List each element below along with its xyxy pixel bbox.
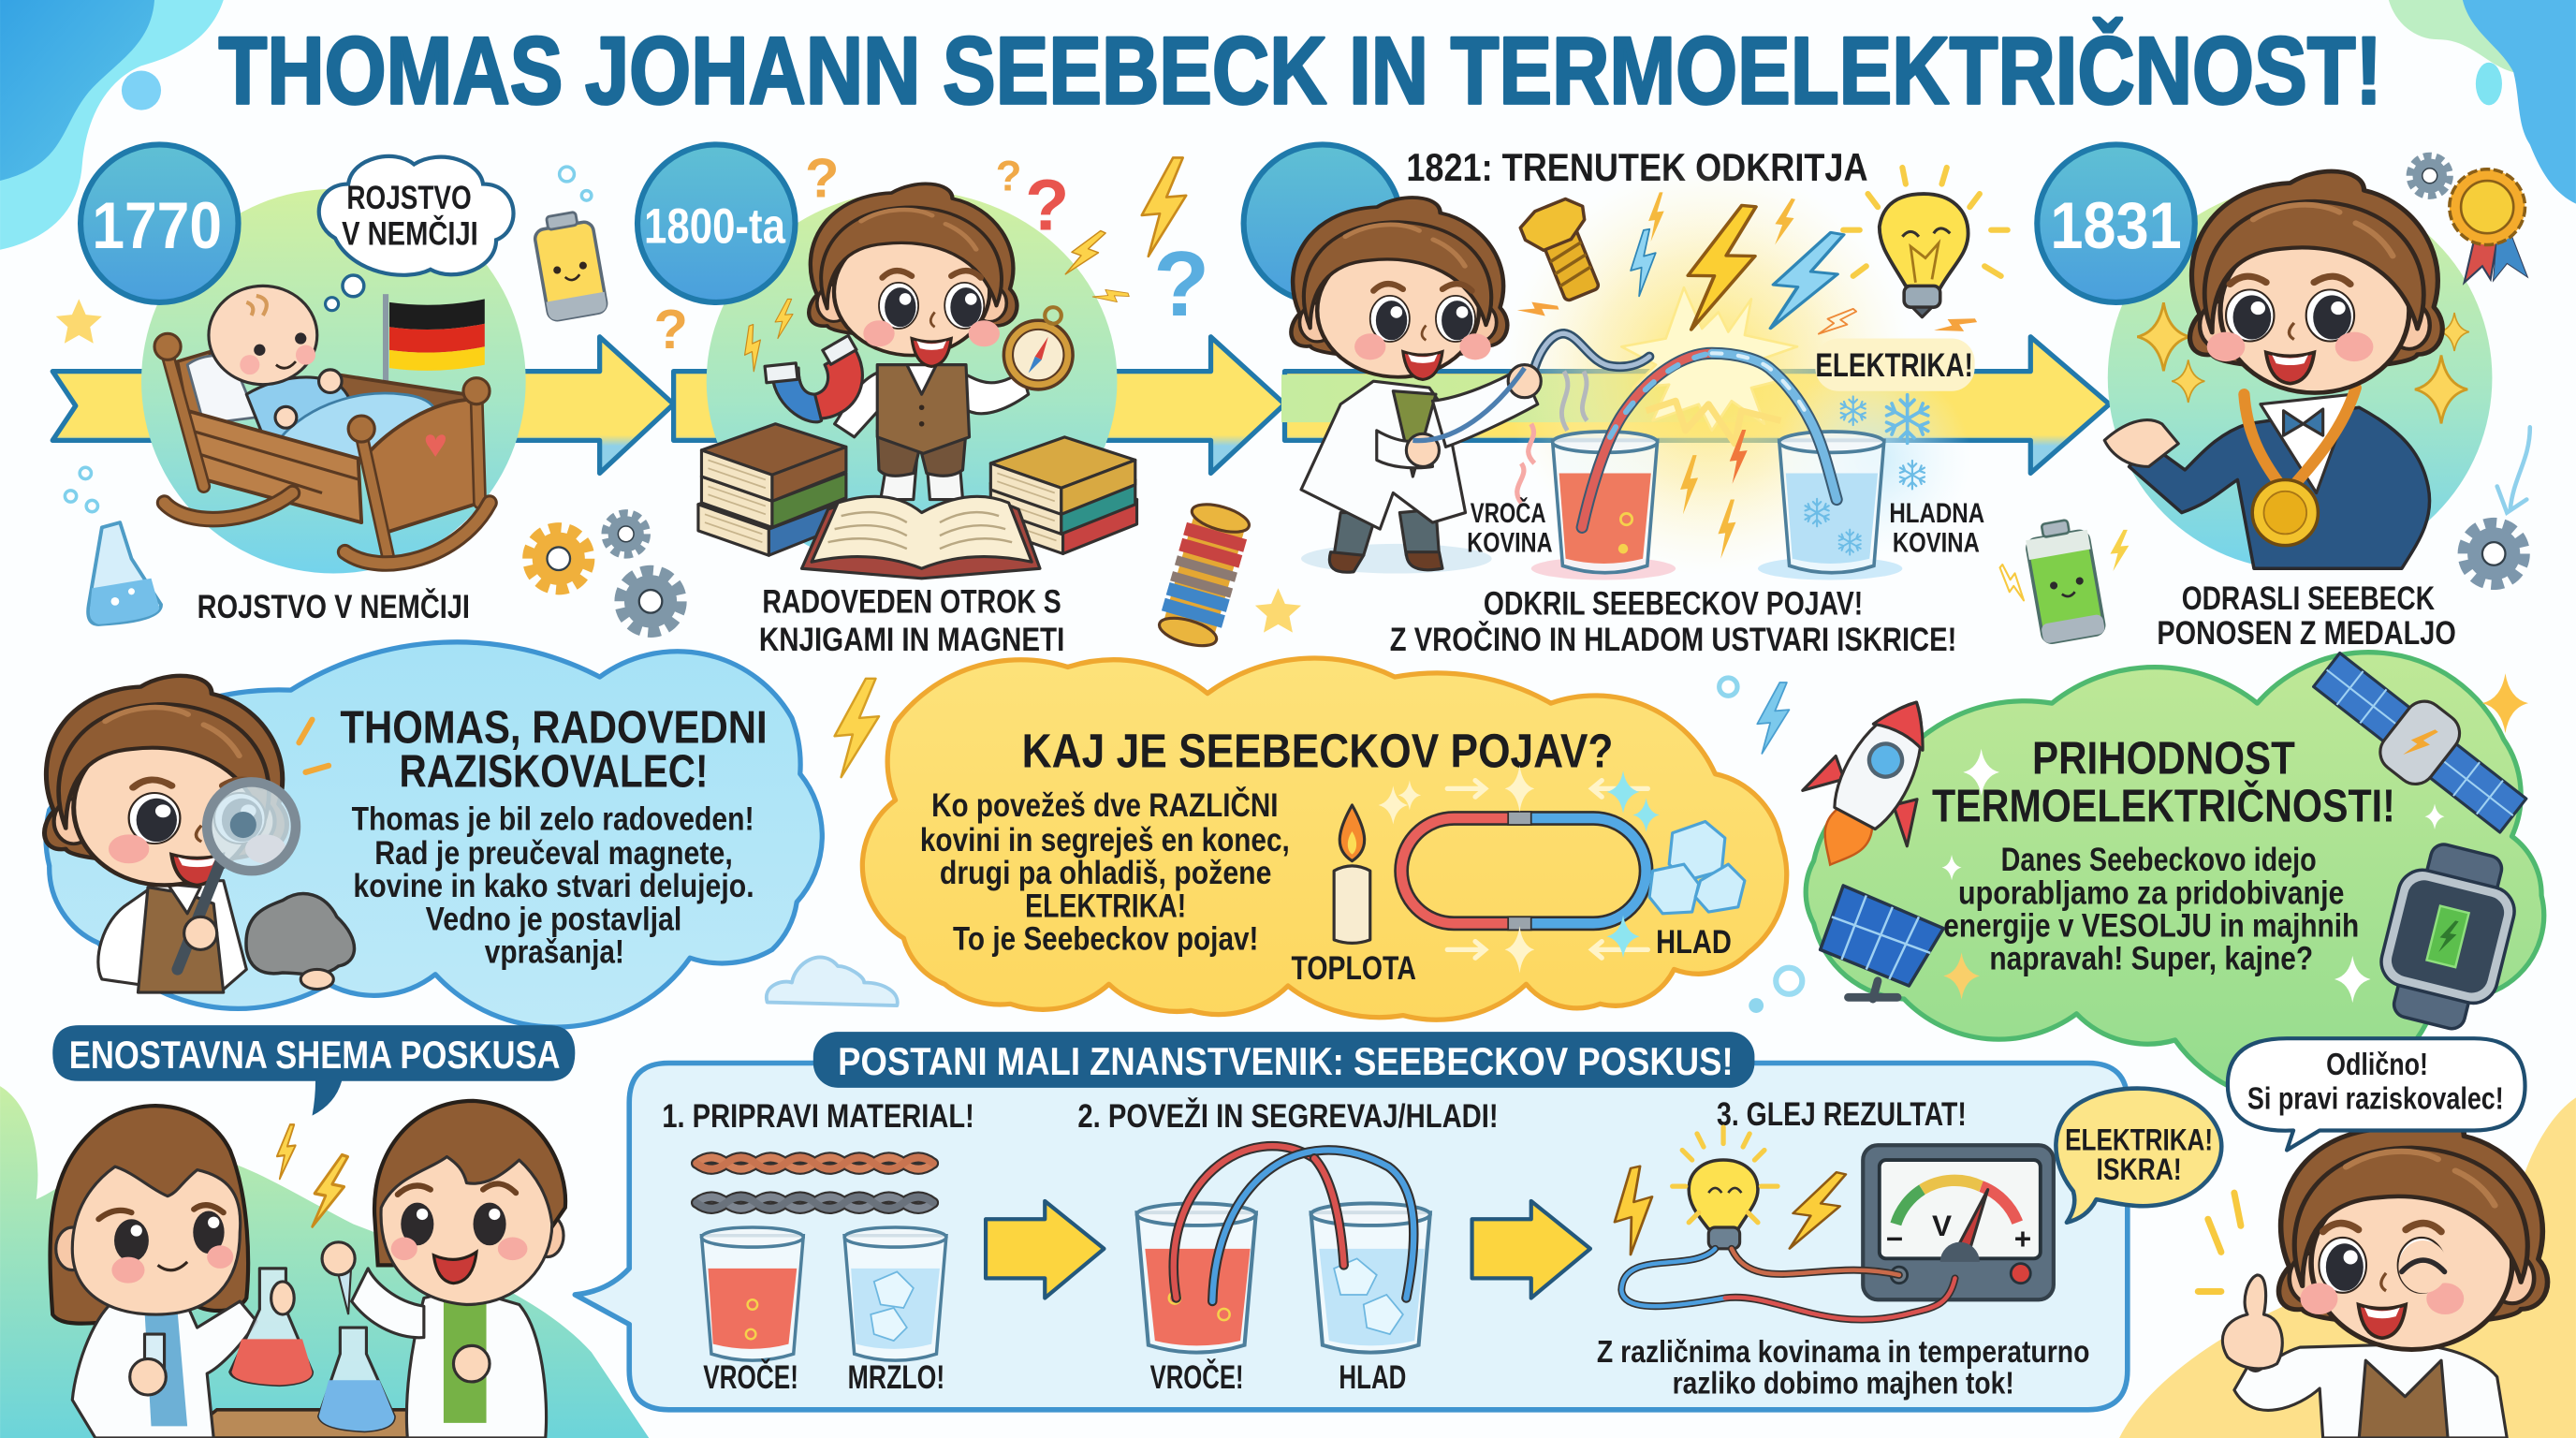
light bulb	[1843, 168, 2008, 317]
text block: drugi pa ohladiš, požene	[940, 855, 1271, 891]
step 3: wires	[1621, 1249, 1955, 1320]
step 1 labels: MRZLO!	[848, 1359, 944, 1396]
horseshoe magnet	[765, 335, 862, 422]
spark marks	[299, 720, 329, 772]
label: ROJSTVO V NEMČIJI	[198, 588, 470, 625]
icon: flask	[88, 522, 161, 624]
current arrows and sparkles	[1379, 765, 1660, 974]
panel: 1831 adult	[2037, 144, 2526, 652]
lightning	[277, 1124, 350, 1234]
arrow	[986, 1201, 1104, 1298]
thermocouple loop	[1401, 812, 1647, 930]
callout: elektrika iskra: ELEKTRIKA!	[2065, 1123, 2213, 1157]
backdrop circle	[141, 189, 526, 574]
text block: Ko povežeš dve RAZLIČNI	[931, 786, 1278, 824]
decoration: top-left blob	[0, 0, 224, 250]
rock	[246, 894, 354, 990]
year badge 1800-ta	[637, 144, 795, 302]
icon: blue recycle arrow	[2497, 427, 2530, 513]
cloud background	[862, 658, 1787, 1020]
panel: what is the Seebeck effect cloud	[862, 658, 1787, 1020]
lightning bolts	[1516, 192, 1978, 559]
icon: wire spool	[1155, 499, 1253, 652]
year badge 1831: 1831	[2050, 188, 2182, 262]
labels: hot and cold metal	[1467, 497, 1984, 559]
labels: hot and cold metal: KOVINA	[1893, 528, 1980, 559]
wink cover	[2398, 1240, 2448, 1293]
text block: Rad je preučeval magnete,	[374, 835, 733, 872]
rocket	[1778, 674, 1969, 892]
thumbs up hand	[2222, 1275, 2282, 1369]
step 3 caption: razliko dobimo majhen tok!	[1673, 1366, 2014, 1401]
cloud background	[46, 642, 822, 1027]
table	[181, 1410, 440, 1438]
child head	[809, 183, 1017, 366]
heading: THOMAS, RADOVEDNI	[340, 702, 768, 753]
timeline ribbon arrow	[52, 337, 2110, 473]
step 2 labels: VROČE!	[1150, 1358, 1244, 1396]
red flask	[230, 1269, 313, 1385]
labels: hot and cold metal: VROČA	[1471, 497, 1546, 529]
callout elektrika	[1815, 339, 1975, 391]
bolt screw	[1516, 194, 1614, 307]
sparkles	[2137, 302, 2469, 423]
icon: blue lightning and dots	[1720, 678, 1802, 1013]
text block: To je Seebeckov pojav!	[953, 920, 1258, 957]
blue flask	[319, 1328, 394, 1431]
scientist body	[1301, 365, 1541, 574]
panel: future of thermoelectricity cloud: TERMOELEKTRIČNOSTI!	[1932, 779, 2395, 832]
speech bubble: Odlično	[2228, 1038, 2525, 1151]
decorative bubbles left	[65, 167, 592, 512]
adult body	[2104, 388, 2430, 568]
hot glass	[1517, 372, 1676, 580]
text block: Danes Seebeckovo idejo	[2001, 842, 2317, 878]
lightning sparks	[736, 157, 1186, 373]
step 3: voltmeter: +	[2014, 1222, 2031, 1255]
speech bubble: Odlično: Si pravi raziskovalec!	[2247, 1082, 2504, 1117]
label: RADOVEDEN OTROK S	[762, 584, 1061, 621]
gear small	[2410, 156, 2449, 195]
caption: ODRASLI SEEBECK	[2182, 580, 2436, 617]
icon: sparks by battery	[1992, 530, 2129, 603]
callout elektrika: ELEKTRIKA!	[1815, 347, 1973, 384]
decoration: top-right blob	[2389, 0, 2576, 204]
step 3: bulb and bolts	[1601, 1127, 1849, 1256]
panel: what is the Seebeck effect cloud: HLAD	[1656, 924, 1732, 961]
adult head	[2190, 171, 2442, 393]
right book stack	[990, 437, 1137, 553]
girl	[51, 1106, 256, 1438]
icon: lightning between clouds	[835, 679, 879, 777]
body	[2234, 1344, 2507, 1438]
callout: elektrika iskra: ISKRA!	[2096, 1152, 2182, 1186]
text block: ELEKTRIKA!	[1025, 888, 1186, 924]
panel: future of thermoelectricity cloud	[1778, 638, 2544, 1102]
cold glass	[1758, 432, 1902, 580]
panel: curious explorer cloud	[45, 642, 822, 1027]
scientist head	[1291, 198, 1507, 379]
thought cloud	[319, 156, 513, 311]
panel: 1821 discovery	[1244, 144, 2008, 658]
snowflakes	[1841, 395, 1928, 489]
magnifying glass	[178, 782, 296, 969]
step 2 labels: HLAD	[1339, 1359, 1406, 1396]
header pill	[813, 1032, 1754, 1088]
step 3: voltmeter: V	[1932, 1209, 1952, 1242]
icon: gears centre	[529, 514, 681, 631]
floating question marks: ?	[654, 298, 688, 360]
German flag	[383, 294, 485, 413]
text block: kovine in kako stvari delujejo.	[353, 868, 754, 904]
floating question marks: ?	[805, 147, 839, 210]
panel: timeline 1800s child: KNJIGAMI IN MAGNETI	[759, 622, 1064, 658]
labels: hot and cold metal: KOVINA	[1467, 528, 1553, 559]
compass	[1003, 307, 1073, 389]
glow burst	[1503, 165, 1971, 575]
labels: TOPLOTA	[1292, 950, 1416, 987]
boy	[322, 1101, 565, 1438]
step headings	[662, 1096, 1967, 1135]
caption: ODKRIL SEEBECKOV POJAV!	[1484, 585, 1863, 622]
year badge 1770: 1770	[92, 188, 222, 262]
text block: vprašanja!	[485, 933, 624, 970]
backdrop circle	[2108, 185, 2492, 570]
icon: star left	[56, 299, 102, 344]
step headings: 3. GLEJ REZULTAT!	[1717, 1096, 1967, 1133]
child body	[835, 365, 1029, 500]
heading: KAJ JE SEEBECKOV POJAV?	[1022, 725, 1613, 778]
explorer body	[98, 881, 246, 992]
decoration: bottom-left hill	[0, 1086, 649, 1438]
callout: elektrika iskra	[2056, 1089, 2221, 1223]
labels: hot and cold metal: HLADNA	[1889, 498, 1984, 529]
floating question marks: ?	[996, 153, 1021, 200]
explorer head	[45, 676, 286, 886]
panel: become a little scientist	[575, 1032, 2221, 1410]
icon: green battery	[2024, 517, 2105, 644]
step 1 labels: VROČE!	[703, 1358, 798, 1396]
step 2 labels	[1150, 1358, 1406, 1396]
cradle with baby	[154, 286, 490, 564]
step headings: 2. POVEŽI IN SEGREVAJ/HLADI!	[1077, 1097, 1499, 1135]
step 1 labels	[703, 1358, 944, 1396]
step 3 caption	[1597, 1335, 2089, 1401]
text block	[1943, 842, 2359, 976]
decoration: bottom-right blob	[2119, 1097, 2576, 1438]
heading: PRIHODNOST	[2032, 734, 2295, 785]
panel: 1821 discovery: Z VROČINO IN HLADOM USTVARI ISKRICE!	[1390, 621, 1956, 658]
floating question marks: ?	[1153, 232, 1209, 335]
panel: timeline 1800s child	[637, 144, 1209, 658]
medal rosette	[2450, 169, 2526, 283]
text block: kovini in segreješ en konec,	[920, 822, 1290, 858]
text block: energije v VESOLJU in majhnih	[1943, 907, 2359, 944]
text block: Thomas je bil zelo radoveden!	[352, 800, 754, 837]
twisted wire arch	[1531, 333, 1837, 527]
exclamation strokes	[2198, 1193, 2241, 1291]
thought cloud: ROJSTVO	[346, 180, 472, 216]
panel: curious explorer cloud: RAZISKOVALEC!	[400, 747, 708, 798]
open book	[802, 496, 1040, 579]
text block	[920, 786, 1290, 957]
text block	[352, 800, 754, 970]
illustration: two kids doing experiment	[51, 1101, 565, 1438]
step headings: 1. PRIPRAVI MATERIAL!	[662, 1098, 974, 1135]
floating question marks	[654, 147, 1209, 360]
text block: uporabljamo za pridobivanje	[1958, 874, 2344, 911]
icon: gear bottom right	[2465, 524, 2524, 583]
year badge partly hidden	[1244, 144, 1401, 302]
icon: yellow battery	[532, 210, 607, 321]
sparkles	[1942, 673, 2528, 1003]
text block: Vedno je postavljal	[426, 901, 681, 937]
backdrop circle	[707, 191, 1117, 572]
ice cubes	[1649, 822, 1745, 914]
panel: timeline 1770 birth	[80, 144, 526, 625]
text block: napravah! Super, kajne?	[1989, 940, 2313, 976]
step 1: twisted wires	[696, 1157, 933, 1209]
panel: 1831 adult: PONOSEN Z MEDALJO	[2157, 615, 2456, 652]
step 1: hot and cold glasses	[701, 1227, 946, 1360]
step 3: voltmeter	[1863, 1145, 2054, 1299]
character: winking boy with thumbs up	[2198, 1116, 2548, 1438]
head	[2279, 1116, 2548, 1349]
cloud background	[1806, 653, 2544, 1102]
step 3: voltmeter: −	[1886, 1222, 1903, 1255]
speech bubble: Odlično: Odlično!	[2326, 1048, 2428, 1082]
candle	[1334, 805, 1370, 943]
step 2: connected glasses	[1137, 1146, 1430, 1353]
floating question marks: ?	[1025, 166, 1069, 246]
heading: 1821: TRENUTEK ODKRITJA	[1406, 145, 1868, 189]
step 3 caption: Z različnima kovinama in temperaturno	[1597, 1335, 2089, 1370]
satellite	[2303, 638, 2538, 846]
year badge 1770	[80, 144, 239, 302]
pill: simple experiment diagram: ENOSTAVNA SHEMA POSKUSA	[69, 1033, 561, 1077]
smartwatch	[2369, 836, 2526, 1037]
panel background with pointer	[575, 1064, 2128, 1410]
arrow	[1472, 1201, 1590, 1298]
year badge 1831	[2037, 144, 2195, 302]
pill: simple experiment diagram	[52, 1025, 575, 1116]
year badge 1800-ta: 1800-ta	[644, 199, 786, 255]
solar panel	[1821, 886, 1943, 999]
header pill: POSTANI MALI ZNANSTVENIK: SEEBECKOV POSKUS!	[838, 1039, 1734, 1083]
left book stack	[698, 424, 846, 555]
thought cloud: V NEMČIJI	[342, 214, 478, 252]
icon: star centre	[1255, 588, 1301, 633]
icon: small cloud	[767, 957, 898, 1005]
